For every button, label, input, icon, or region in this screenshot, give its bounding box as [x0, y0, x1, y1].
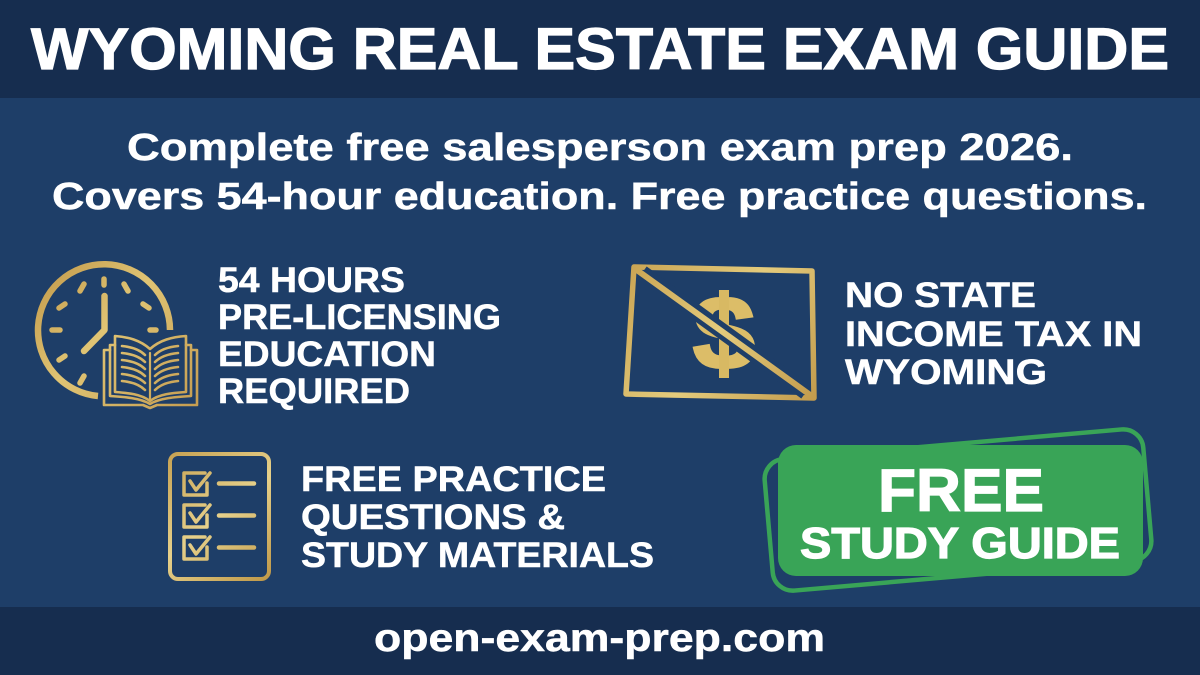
- title: WYOMING REAL ESTATE EXAM GUIDE: [31, 17, 1169, 82]
- feature text: practice questions: STUDY MATERIALS: [301, 536, 654, 575]
- website url: open-exam-prep.com: [374, 617, 825, 660]
- badge: free study guide: [763, 428, 1153, 592]
- feature text: no income tax: [845, 276, 1142, 392]
- header band: [0, 0, 1200, 98]
- feature text: practice questions: QUESTIONS &: [301, 498, 565, 537]
- feature text: no income tax: WYOMING: [845, 353, 1047, 392]
- feature text: education hours: EDUCATION: [218, 335, 436, 374]
- icon: clock and open book: [38, 264, 197, 408]
- feature text: no income tax: NO STATE: [845, 276, 1036, 315]
- footer band: [0, 607, 1200, 675]
- feature text: education hours: 54 HOURS: [218, 261, 405, 300]
- subtitle: Complete free salesperson exam prep 2026.: [127, 127, 1073, 169]
- feature text: practice questions: FREE PRACTICE: [301, 460, 606, 499]
- icon: Wyoming outline with crossed-out dollar: [626, 267, 814, 398]
- badge: free study guide: STUDY GUIDE: [800, 519, 1120, 568]
- badge: free study guide: FREE: [878, 457, 1044, 524]
- slash: [642, 273, 806, 392]
- dollar sign: $: [693, 276, 755, 392]
- subtitle: Covers 54-hour education. Free practice questions.: [52, 176, 1147, 218]
- feature text: practice questions: [301, 460, 654, 575]
- clock face: [38, 264, 170, 396]
- state outline: [626, 267, 814, 398]
- feature text: education hours: PRE-LICENSING: [218, 298, 501, 337]
- feature text: no income tax: INCOME TAX IN: [845, 315, 1142, 354]
- feature text: education hours: REQUIRED: [218, 372, 410, 411]
- icon: checklist: [170, 454, 269, 579]
- open book: [104, 336, 197, 408]
- subtitle: [52, 127, 1147, 218]
- feature text: education hours: [218, 261, 501, 411]
